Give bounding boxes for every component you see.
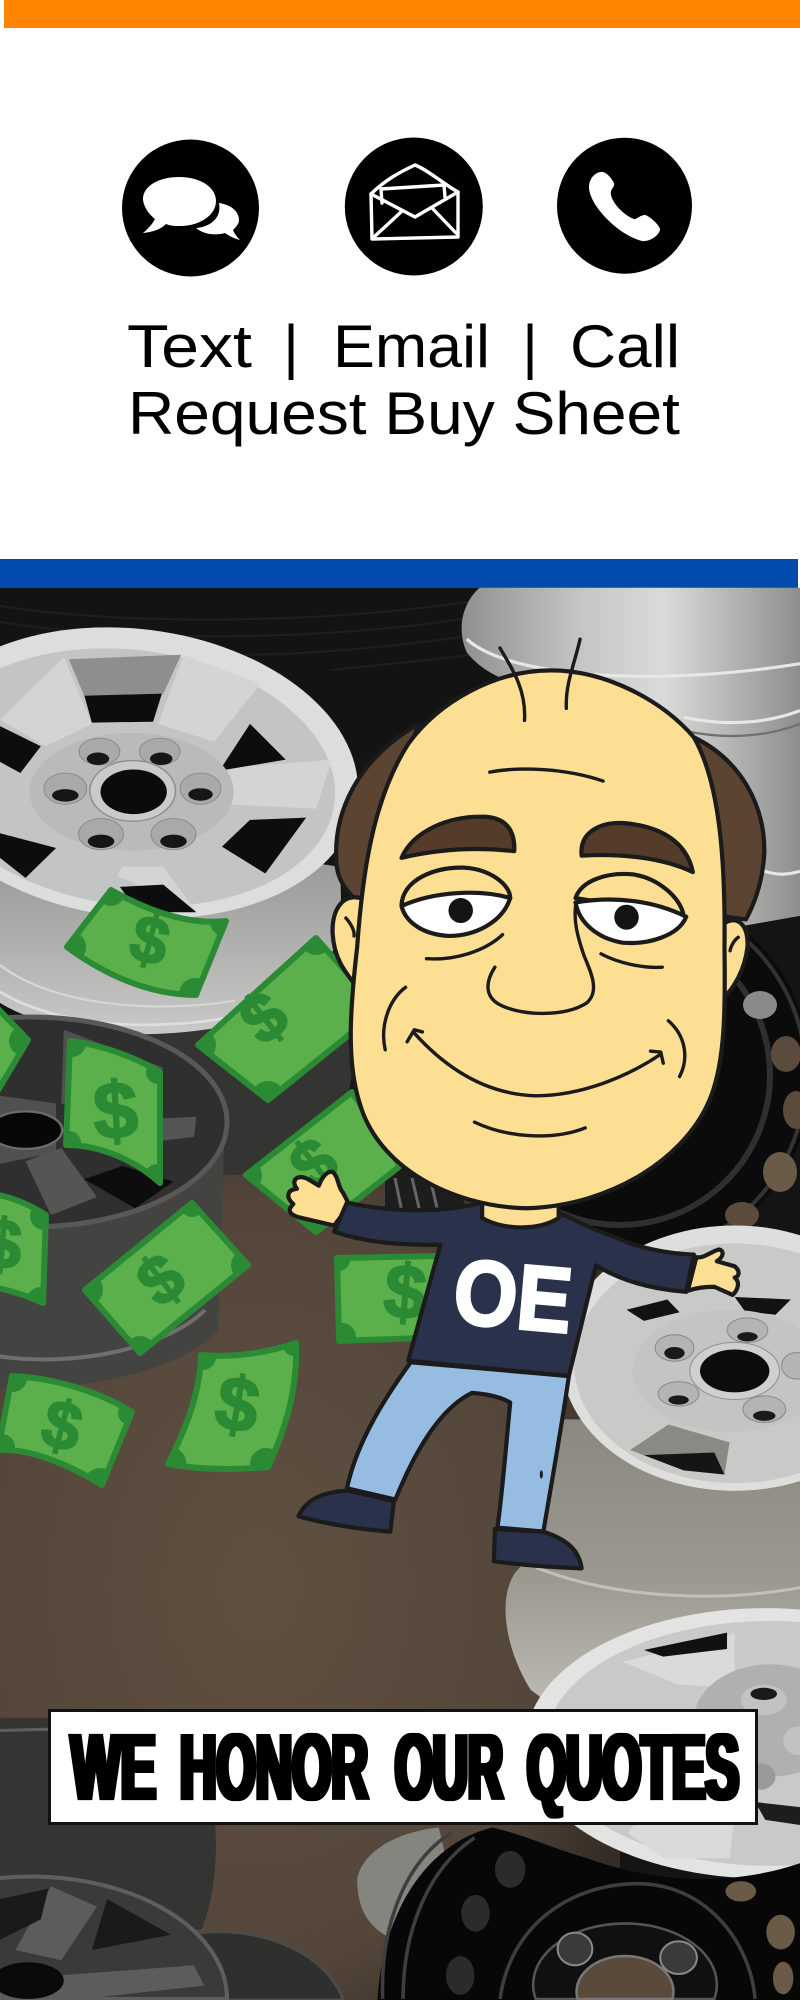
- contact options text: Call: [570, 313, 680, 380]
- silver wheel right: [506, 1226, 800, 1705]
- bill 9: [334, 1253, 436, 1344]
- dark wheel body behind silver wheel: [117, 945, 353, 1175]
- cheeks: [384, 987, 685, 1077]
- bill 4: [0, 1006, 31, 1093]
- icon: text chat bubbles: [122, 140, 259, 276]
- headline banner: WE: [71, 1715, 156, 1819]
- bill 3: [63, 1038, 163, 1186]
- bill 3: $: [91, 1065, 140, 1156]
- bill 6: [82, 1200, 251, 1356]
- contact options text: Text: [127, 313, 252, 380]
- bill 5: [0, 1192, 49, 1306]
- face: [351, 670, 725, 1208]
- headline banner: HONOR: [180, 1715, 368, 1819]
- floor: [0, 1170, 620, 2000]
- shirt logo OE: OE: [450, 1241, 576, 1353]
- shirt: [334, 1203, 694, 1376]
- orange top bar: [4, 0, 800, 28]
- right eye: [576, 874, 684, 916]
- background photo: pile of wheels: [0, 588, 800, 2000]
- neck: [482, 1190, 559, 1227]
- right hand: [688, 1249, 739, 1295]
- small silver wheel behind black wheel: [357, 1828, 459, 1945]
- smile: [407, 1030, 663, 1096]
- bottom left dark wheel: [0, 1718, 343, 2000]
- silver wheel bottom right: [526, 1608, 800, 1879]
- cartoon character: [288, 639, 764, 1568]
- icon: open envelope: [345, 138, 483, 276]
- silver wheel top left: [0, 597, 385, 1034]
- pants: [347, 1362, 569, 1532]
- chin line: [474, 1122, 585, 1136]
- dark gray wheel left: [0, 1017, 227, 1388]
- money bills falling: [0, 878, 440, 1500]
- eyebrows: [402, 817, 693, 872]
- silver cylinder top right: [462, 588, 800, 929]
- nose: [488, 907, 594, 1013]
- eye bags: [427, 935, 662, 967]
- body: [288, 1172, 739, 1568]
- bill 7: [0, 1373, 135, 1488]
- contact options text: |: [283, 313, 299, 380]
- right shoe: [494, 1529, 582, 1568]
- tire stack top left: [0, 588, 500, 758]
- bill 6: $: [123, 1238, 199, 1321]
- blue divider bar: [0, 559, 798, 588]
- black steel wheel behind head: [385, 885, 800, 1265]
- bill 1: [64, 886, 229, 998]
- bill 8: $: [209, 1359, 266, 1450]
- contact options text: Email: [333, 313, 490, 380]
- hair: [336, 724, 764, 919]
- headline banner: OUR: [395, 1715, 503, 1819]
- bill 8: [165, 1340, 300, 1472]
- left hand: [288, 1172, 349, 1226]
- left eye: [402, 868, 510, 905]
- bill 2: $: [226, 976, 302, 1059]
- bill 2: [195, 935, 352, 1104]
- forehead line: [490, 769, 603, 781]
- contact options text: [127, 313, 680, 380]
- contact options text: |: [522, 313, 538, 380]
- head: [333, 639, 764, 1208]
- request buy sheet text: Request Buy Sheet: [128, 380, 680, 447]
- black steel wheel bottom: [378, 1828, 800, 2000]
- bill 7: $: [34, 1384, 90, 1467]
- bill 10: [234, 1092, 400, 1245]
- bill 10: $: [276, 1122, 352, 1205]
- pants crease: [540, 1470, 543, 1479]
- bill 9: $: [380, 1248, 430, 1337]
- icon: phone handset: [557, 138, 692, 274]
- headline banner: [50, 1710, 756, 1824]
- hair strands: [500, 639, 580, 720]
- bill 1: $: [123, 899, 177, 980]
- left shoe: [298, 1491, 394, 1532]
- ears: [333, 897, 748, 1000]
